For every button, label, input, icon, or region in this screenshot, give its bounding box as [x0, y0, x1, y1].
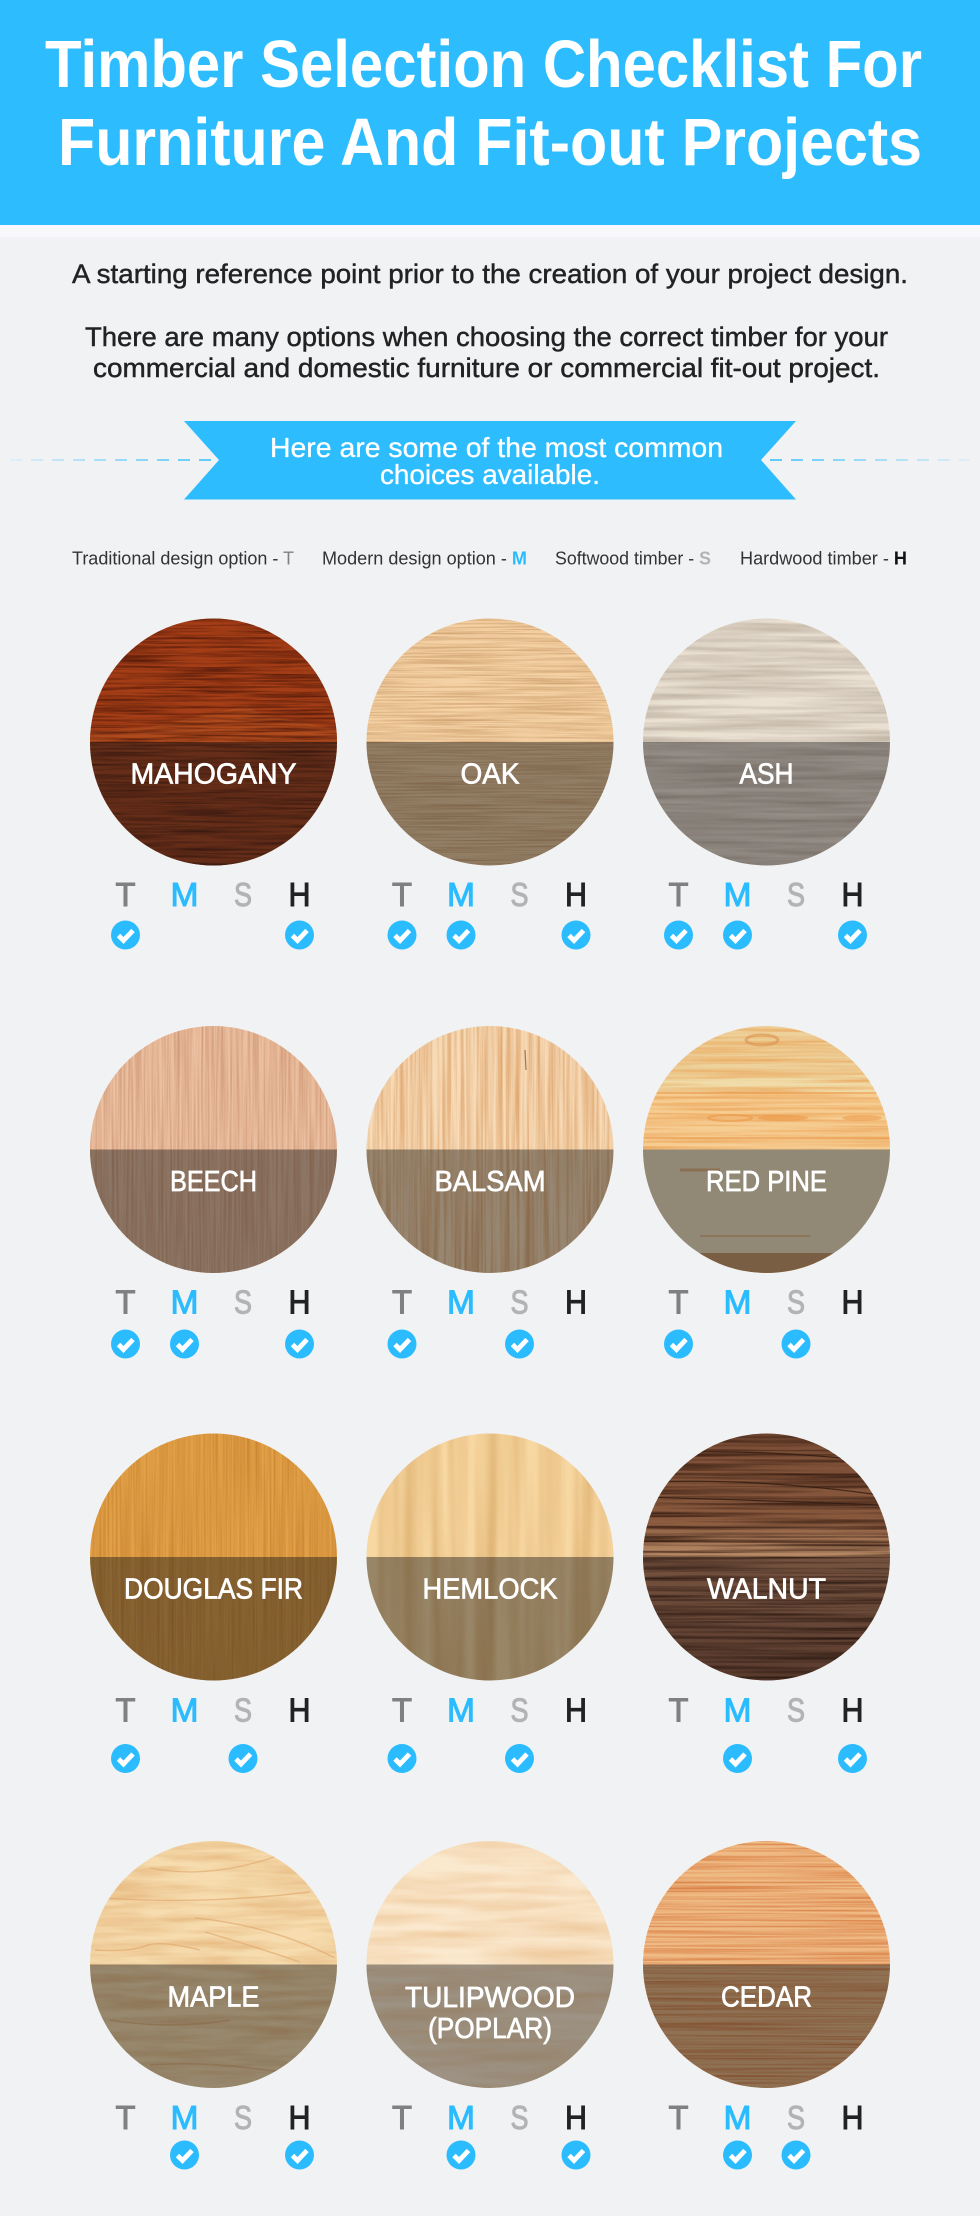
- type letters: S: [787, 1284, 805, 1320]
- type letters: [668, 2099, 864, 2136]
- type letters: H: [288, 876, 310, 913]
- title: [45, 27, 922, 180]
- card: maple: [90, 1840, 338, 2170]
- type letters: T: [392, 2099, 412, 2136]
- check marks: [388, 920, 590, 950]
- type letters: M: [170, 1284, 198, 1320]
- wood swatch: ash: [642, 618, 890, 866]
- type letters: M: [447, 2099, 475, 2136]
- type letters: H: [565, 876, 587, 913]
- type letters: [392, 876, 587, 913]
- type letters: S: [787, 1692, 805, 1728]
- type letters: M: [724, 1284, 752, 1320]
- type letters: [392, 1692, 587, 1728]
- dashed line left: [10, 459, 215, 461]
- type letters: [668, 876, 864, 913]
- type letters: M: [724, 2099, 752, 2136]
- wood swatch: mahogany: [89, 618, 338, 866]
- type letters: T: [668, 1692, 688, 1728]
- card: walnut: [642, 1433, 890, 1773]
- wood swatch: balsam: [366, 1026, 614, 1274]
- type letters: [392, 1284, 587, 1320]
- name: douglas fir: DOUGLAS FIR: [124, 1574, 303, 1606]
- type letters: S: [510, 876, 528, 913]
- name: tulipwood (poplar): TULIPWOOD: [405, 1982, 575, 2014]
- type letters: M: [447, 1692, 475, 1728]
- check marks: [723, 1744, 867, 1773]
- check marks: [723, 2140, 810, 2170]
- type letters: S: [234, 876, 252, 913]
- type letters: H: [842, 2099, 864, 2136]
- legend: Softwood timber - S: [555, 548, 711, 568]
- wood swatch: maple: [90, 1840, 338, 2088]
- type letters: S: [510, 1692, 528, 1728]
- name: oak: OAK: [460, 758, 520, 790]
- type letters: S: [787, 2099, 805, 2136]
- card: ash: [642, 618, 890, 950]
- type letters: M: [170, 876, 198, 913]
- ribbon banner: [184, 421, 796, 500]
- type letters: [116, 2099, 310, 2136]
- wood swatch: oak: [366, 618, 614, 866]
- title: Furniture And Fit-out Projects: [58, 105, 922, 180]
- type letters: H: [842, 1692, 864, 1728]
- intro text: There are many options when choosing the correct timber for your: [85, 322, 888, 352]
- header shadow strip: [0, 225, 980, 237]
- intro text: commercial and domestic furniture or commercial fit-out project.: [93, 353, 880, 383]
- type letters: T: [392, 1692, 412, 1728]
- name: hemlock: HEMLOCK: [422, 1574, 558, 1606]
- type letters: [668, 1692, 864, 1728]
- wood swatch: tulipwood: [366, 1840, 614, 2088]
- type letters: S: [234, 1692, 252, 1728]
- type letters: H: [565, 1692, 587, 1728]
- card: cedar: [642, 1840, 890, 2170]
- type letters: M: [447, 876, 475, 913]
- name: ash: ASH: [740, 758, 794, 790]
- card: oak: [366, 618, 614, 950]
- type letters: T: [392, 1284, 412, 1320]
- wood swatch: walnut: [642, 1433, 890, 1681]
- type letters: S: [234, 1284, 252, 1320]
- type letters: [392, 2099, 587, 2136]
- ribbon banner: choices available.: [380, 459, 600, 490]
- check marks: [111, 920, 314, 950]
- type letters: M: [170, 1692, 198, 1728]
- name: tulipwood (poplar): (POPLAR): [428, 2013, 552, 2045]
- card: hemlock: [366, 1433, 614, 1773]
- intro text: [72, 259, 908, 383]
- wood swatch: beech: [90, 1026, 338, 1274]
- type letters: M: [447, 1284, 475, 1320]
- legend: Modern design option - M: [322, 548, 527, 568]
- card: red pine: [640, 1026, 890, 1358]
- type letters: S: [787, 876, 805, 913]
- type letters: T: [668, 876, 688, 913]
- card: douglas fir: [90, 1433, 338, 1773]
- check marks: [388, 1330, 534, 1358]
- type letters: H: [842, 876, 864, 913]
- name: mahogany: MAHOGANY: [130, 758, 296, 790]
- type letters: T: [392, 876, 412, 913]
- name: red pine: RED PINE: [706, 1166, 827, 1198]
- type letters: T: [116, 876, 136, 913]
- type letters: [116, 876, 310, 913]
- legend: Hardwood timber - H: [740, 548, 907, 568]
- type letters: S: [510, 1284, 528, 1320]
- wood swatch: douglas fir: [90, 1433, 338, 1681]
- type letters: M: [724, 876, 752, 913]
- type letters: M: [724, 1692, 752, 1728]
- card: tulipwood (poplar): [366, 1840, 614, 2170]
- header band: [0, 0, 980, 225]
- type letters: T: [116, 2099, 136, 2136]
- card: mahogany: [89, 618, 338, 950]
- check marks: [170, 2140, 314, 2170]
- legend: Traditional design option - T: [72, 548, 294, 568]
- type letters: [668, 1284, 864, 1320]
- name: walnut: WALNUT: [707, 1574, 826, 1606]
- type letters: S: [234, 2099, 252, 2136]
- name: beech: BEECH: [170, 1166, 257, 1198]
- type letters: [116, 1692, 310, 1728]
- ribbon banner: Here are some of the most common: [270, 432, 723, 463]
- card: balsam: [366, 1026, 614, 1358]
- type letters: M: [170, 2099, 198, 2136]
- name: balsam: BALSAM: [434, 1166, 546, 1198]
- type letters: H: [288, 2099, 310, 2136]
- wood swatch: cedar: [642, 1840, 890, 2088]
- type letters: S: [510, 2099, 528, 2136]
- type letters: H: [842, 1284, 864, 1320]
- card: beech: [90, 1026, 338, 1358]
- legend: [72, 548, 907, 568]
- type letters: H: [288, 1692, 310, 1728]
- wood swatch: red pine: [640, 1026, 890, 1274]
- type letters: T: [116, 1284, 136, 1320]
- check marks: [111, 1744, 258, 1773]
- name: tulipwood (poplar): [405, 1982, 575, 2045]
- type letters: H: [565, 2099, 587, 2136]
- type letters: H: [565, 1284, 587, 1320]
- type letters: H: [288, 1284, 310, 1320]
- check marks: [664, 920, 867, 950]
- check marks: [111, 1330, 314, 1358]
- wood swatch: hemlock: [366, 1433, 614, 1681]
- type letters: T: [668, 1284, 688, 1320]
- type letters: T: [668, 2099, 688, 2136]
- type letters: [116, 1284, 310, 1320]
- type letters: T: [116, 1692, 136, 1728]
- check marks: [446, 2140, 590, 2170]
- dashed line right: [770, 459, 970, 461]
- name: cedar: CEDAR: [721, 1982, 812, 2014]
- check marks: [388, 1744, 534, 1773]
- check marks: [664, 1330, 810, 1358]
- intro text: A starting reference point prior to the creation of your project design.: [72, 259, 908, 289]
- name: maple: MAPLE: [168, 1982, 260, 2014]
